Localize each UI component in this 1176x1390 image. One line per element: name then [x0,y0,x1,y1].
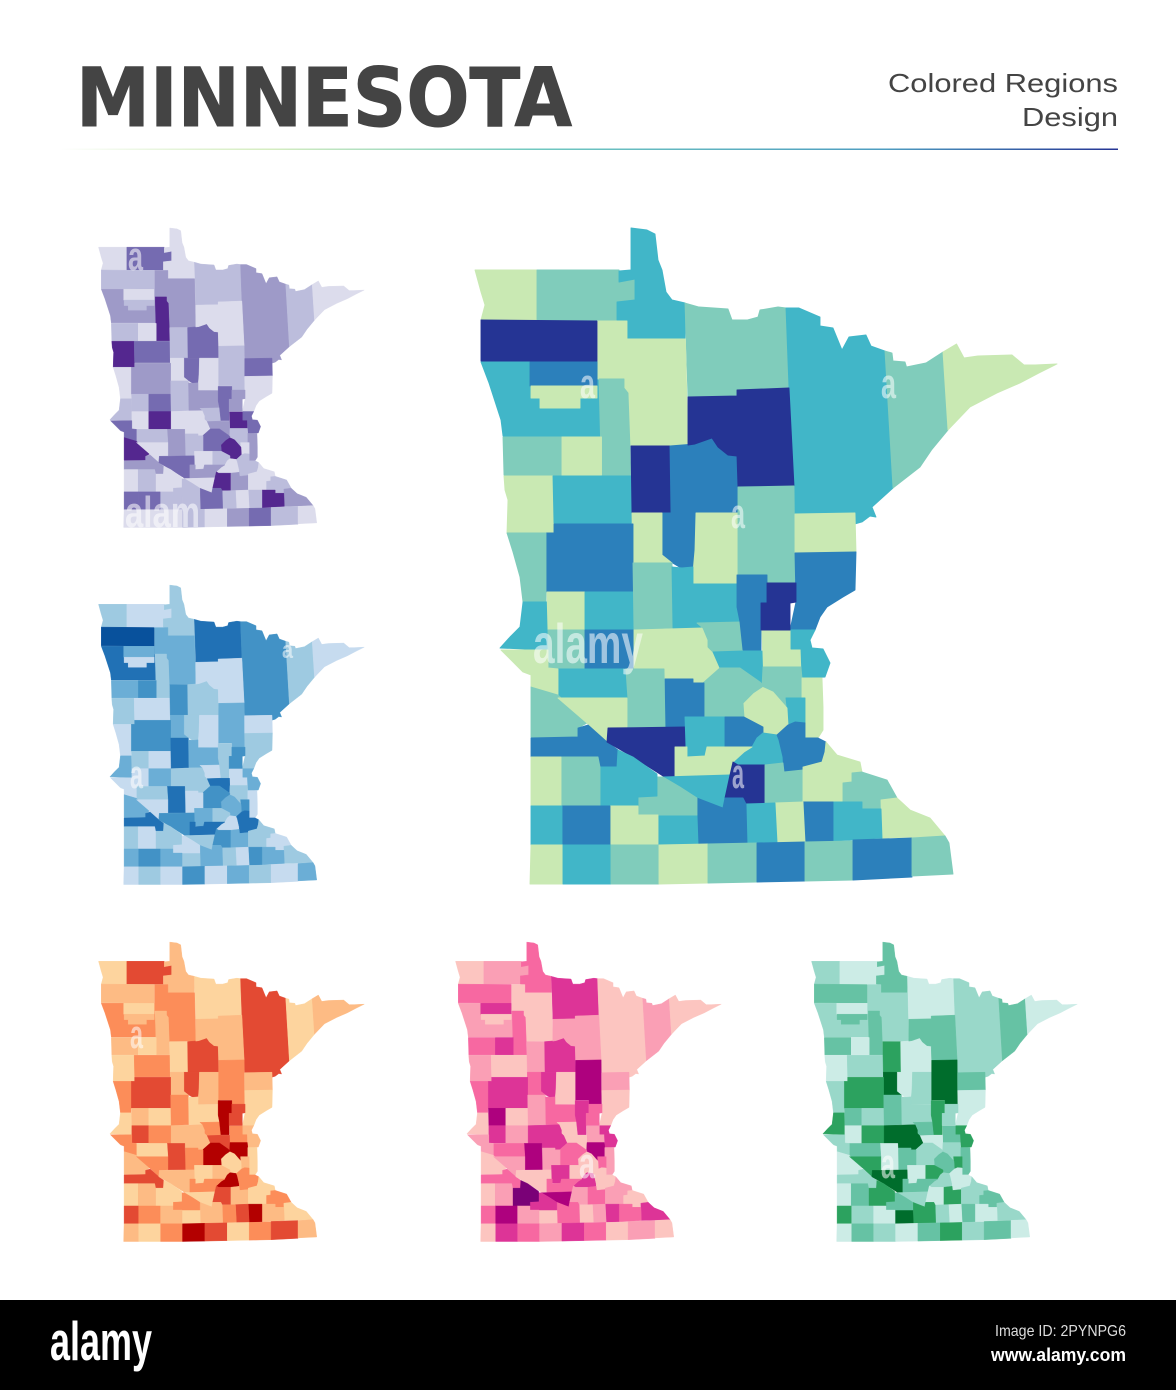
header gradient rule [60,148,1118,150]
map: large teal and blue Minnesota [475,228,1057,884]
stock watermarks over the maps: a [731,490,745,537]
stock watermarks over the maps: a [881,1140,895,1187]
footer bar: Image ID: 2PYNPG6 [995,1323,1126,1340]
stock watermarks over the maps: a [282,637,294,664]
footer bar: www.alamy.com [990,1345,1126,1365]
stock watermarks over the maps: a [732,750,744,797]
stock watermarks over the maps: a [130,1013,143,1057]
subtitle: Colored Regions [888,68,1118,98]
stock watermarks over the maps: a [580,360,595,407]
footer bar [0,1300,1176,1390]
stock watermarks over the maps: a [579,1139,595,1188]
stock watermarks over the maps: a [130,753,143,797]
stock watermarks over the maps: alam [125,488,200,537]
stock watermarks over the maps: a [128,235,144,279]
map: small pink and magenta Minnesota [456,942,721,1242]
subtitle [888,68,1118,132]
subtitle: Design [1022,102,1118,132]
stock watermarks over the maps [125,235,896,1188]
stock watermarks over the maps: a [881,360,896,407]
footer bar: alamy [50,1310,152,1372]
stock watermarks over the maps: alamy [533,612,643,675]
map: small orange and red Minnesota [99,942,364,1242]
title: MINNESOTA [76,52,572,146]
map: small purple Minnesota [99,228,364,527]
map: small green Minnesota [812,942,1077,1242]
map: small blue Minnesota [99,585,364,885]
